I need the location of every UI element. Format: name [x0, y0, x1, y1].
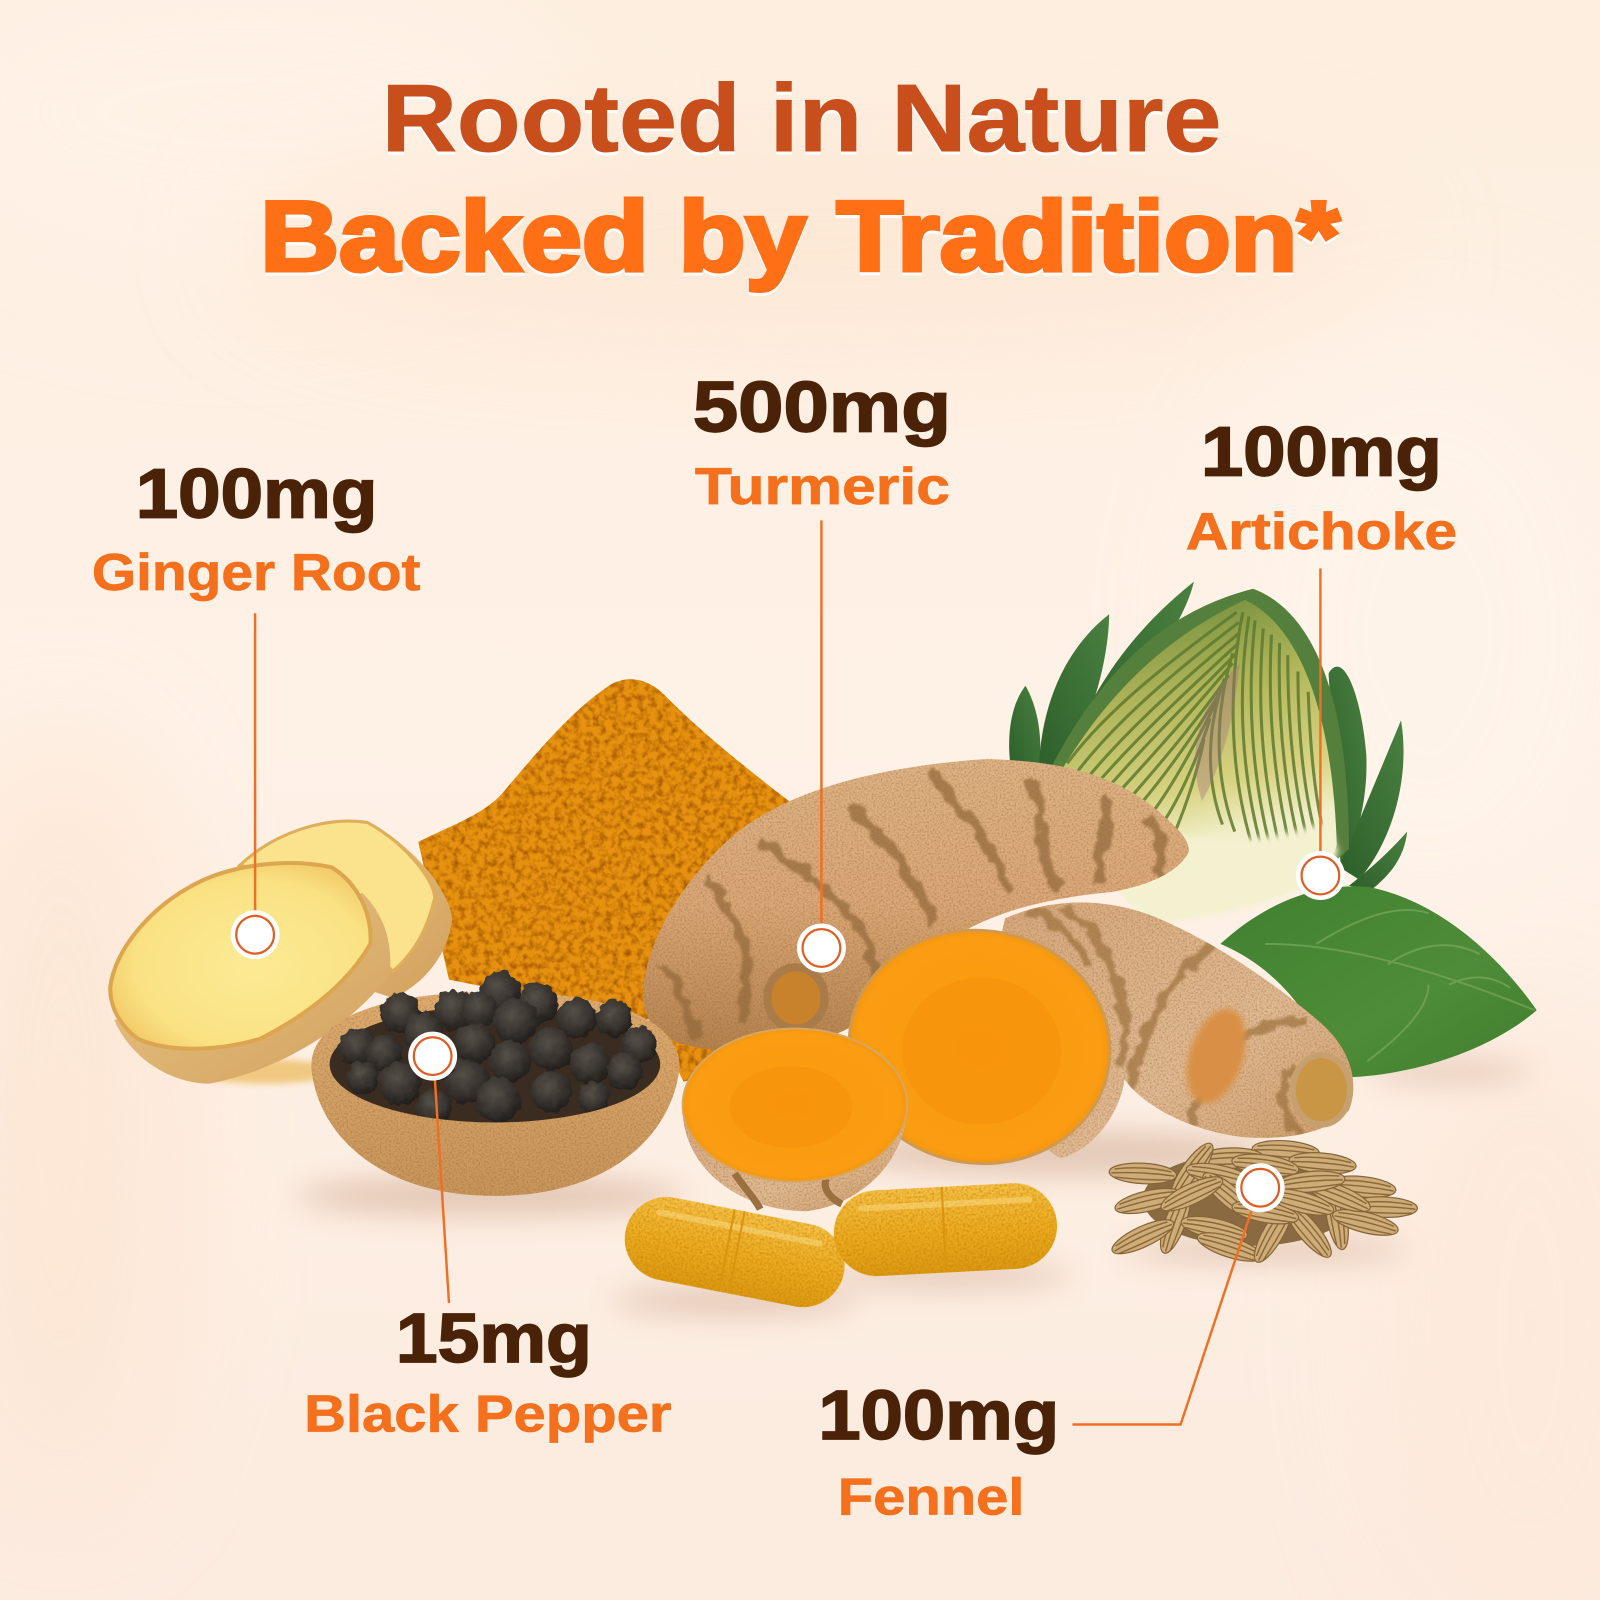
illustration: turmeric root cut: [834, 903, 1353, 1180]
root tip: [1293, 1055, 1350, 1124]
root stripes: [1031, 908, 1306, 1133]
connector: artichoke: [1319, 568, 1322, 857]
artichoke purple centre: [1195, 663, 1240, 801]
illustration: artichoke: [1009, 582, 1407, 923]
name: Turmeric: [695, 458, 950, 516]
connector: fennel: [1072, 1209, 1252, 1424]
capsule seam: [719, 1209, 745, 1293]
illustration: bowl of black pepper: [311, 971, 680, 1196]
ginger shadow glow: [194, 1059, 337, 1084]
root knob: [767, 967, 824, 1029]
marker: black pepper: [408, 1032, 457, 1081]
label: ginger root: [92, 454, 420, 602]
illustration: capsule left: [618, 1190, 852, 1314]
slice stripes: [735, 1173, 842, 1209]
artichoke wrap: [1051, 589, 1349, 878]
name: Black Pepper: [304, 1386, 671, 1444]
dose: 15mg: [396, 1299, 592, 1377]
bowl body: [311, 992, 680, 1196]
illustration: ginger slices: [110, 820, 452, 1084]
marker: fennel: [1236, 1163, 1285, 1212]
title line 2: Backed by Tradition*: [260, 180, 1340, 291]
artichoke striations: [1067, 612, 1327, 855]
root body: [997, 903, 1353, 1158]
name: Fennel: [838, 1468, 1024, 1526]
illustration: green leaf: [1220, 886, 1537, 1078]
back slice: [240, 820, 452, 998]
inner ring: [902, 978, 1061, 1124]
slice ring: [730, 1066, 852, 1148]
name: Artichoke: [1186, 503, 1457, 561]
bowl inner: [330, 1006, 660, 1122]
connector: black pepper: [435, 1077, 449, 1303]
title: [260, 65, 1340, 291]
root stripes: [663, 770, 1163, 1041]
root patch: [1176, 1001, 1257, 1111]
title line 1: Rooted in Nature: [382, 65, 1221, 172]
object shadows: [296, 1061, 1531, 1315]
marker: turmeric: [797, 923, 846, 972]
root body: [643, 759, 1189, 1051]
capsule highlight: [659, 1212, 819, 1244]
dose: 500mg: [693, 368, 951, 448]
marker: artichoke: [1296, 851, 1345, 900]
dose: 100mg: [136, 454, 378, 532]
orange cut face: [834, 914, 1125, 1180]
illustration: fennel seeds: [1108, 1138, 1418, 1267]
slice face: [683, 1029, 907, 1182]
label: black pepper: [304, 1299, 671, 1444]
capsule highlight: [861, 1200, 1029, 1208]
name: Ginger Root: [92, 544, 420, 602]
illustration: capsule right: [832, 1181, 1059, 1278]
marker: ginger: [231, 910, 280, 959]
illustration: turmeric powder: [418, 679, 806, 1082]
connector: ginger: [254, 613, 256, 915]
illustration: turmeric root top: [643, 759, 1189, 1051]
illustration: turmeric slice: [683, 1029, 907, 1211]
connector: turmeric: [820, 520, 823, 929]
artichoke outer leaves: [1009, 582, 1407, 890]
capsule seam: [942, 1187, 946, 1272]
peppercorns: [339, 971, 658, 1126]
dose: 100mg: [1201, 413, 1442, 491]
seed mound base: [1143, 1152, 1357, 1246]
front slice: [110, 863, 390, 1084]
dose: 100mg: [818, 1376, 1059, 1454]
label: turmeric: [693, 368, 951, 516]
label: fennel: [818, 1376, 1059, 1526]
slice skin: [683, 1107, 906, 1211]
artichoke cut heart: [1063, 600, 1337, 921]
artichoke pale base: [1129, 820, 1339, 923]
label: artichoke: [1186, 413, 1457, 561]
